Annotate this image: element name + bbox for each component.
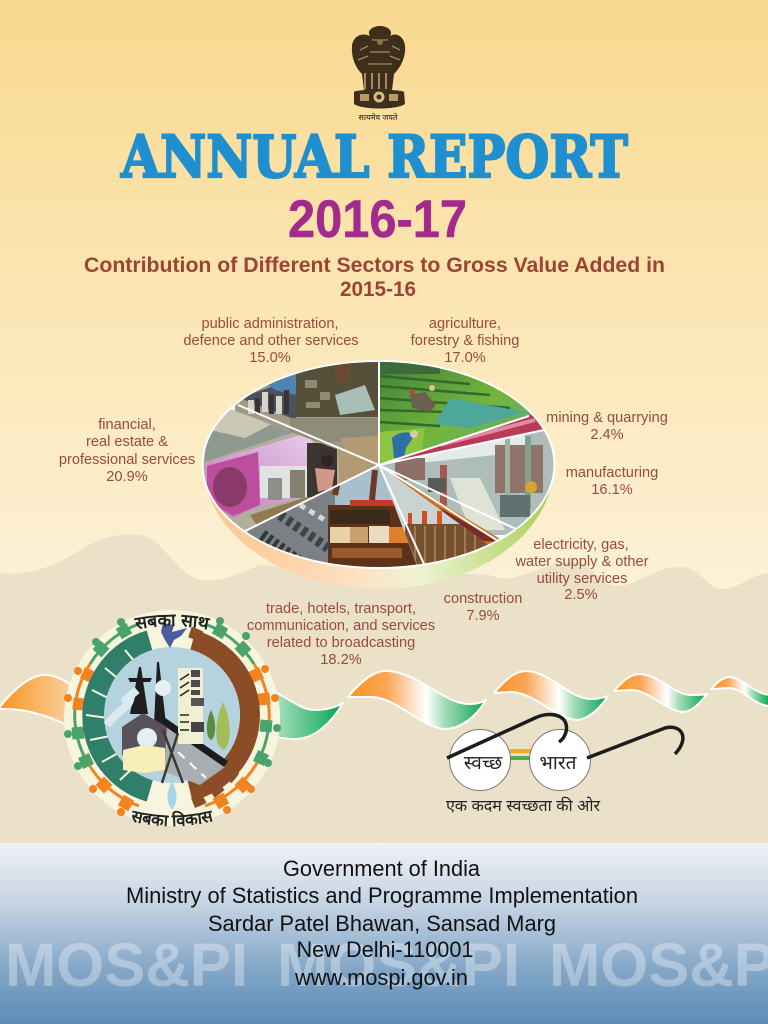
label: construction: 7.9%: [466, 608, 500, 624]
watermark: MOS&PI: [5, 931, 248, 999]
pie chart: [195, 355, 560, 589]
footer address: Sardar Patel Bhawan, Sansad Marg: [208, 911, 556, 936]
label: mining: mining & quarrying: [546, 410, 668, 426]
logo: towers: [128, 662, 171, 724]
title: ANNUAL REPORT: [120, 123, 628, 191]
logo: india map: [161, 623, 187, 648]
slice: construction: [382, 468, 488, 564]
label: public administration: 15.0%: [249, 350, 291, 366]
label: trade: communication, and services: [247, 618, 435, 634]
year: 2016-17: [288, 190, 467, 249]
logo: arrow sweep: [107, 690, 137, 725]
label: agriculture: forestry & fishing: [411, 333, 519, 349]
logo: wheat wreath: [86, 642, 150, 790]
logo: sabka saath sabka vikas: [64, 610, 281, 826]
label: trade: related to broadcasting: [267, 635, 415, 651]
slice: manufacturing: [382, 431, 554, 535]
swachh word: स्वच्छ: [464, 753, 503, 774]
logo: water drop: [167, 780, 177, 810]
label: public administration: [183, 316, 359, 366]
chart heading: Contribution of Different Sectors to Gross Value Added in: [84, 253, 665, 277]
footer address: New Delhi-110001: [296, 937, 474, 962]
slice: electricity: [390, 473, 500, 545]
label: public administration: defence and other services: [183, 333, 359, 349]
logo: central disc: [104, 647, 240, 783]
label: agriculture: 17.0%: [444, 350, 486, 366]
label: agriculture: agriculture,: [429, 316, 501, 332]
label: trade: [247, 601, 435, 668]
slice: mining: [398, 414, 543, 460]
label: financial: 20.9%: [106, 469, 148, 485]
logo: tools: [162, 730, 183, 783]
slice dividers: [238, 360, 544, 564]
label: mining: [546, 410, 668, 443]
label: electricity: [514, 537, 649, 603]
logo: trees: [207, 702, 230, 750]
chart heading: [84, 253, 665, 301]
slice: agriculture: [380, 362, 532, 464]
logo: house and book: [122, 713, 167, 773]
logo: road and rail: [160, 720, 226, 785]
label: agriculture: [411, 316, 519, 366]
swachh bharat glasses logo: [446, 714, 683, 815]
label: financial: real estate &: [86, 434, 168, 450]
logo: building: [178, 668, 204, 744]
label: trade: trade, hotels, transport,: [266, 601, 416, 617]
label: manufacturing: [566, 465, 658, 498]
pie rim: [203, 465, 554, 589]
slice: public administration: [235, 360, 380, 470]
label: trade: 18.2%: [320, 652, 362, 668]
watermark: MOS&PI: [277, 931, 520, 999]
emblem motto: सत्यमेव जयते: [359, 112, 398, 122]
label: electricity: electricity, gas,: [533, 537, 629, 553]
footer address: [126, 856, 638, 990]
tricolour ribbon: [0, 671, 768, 739]
label: public administration: public administration,: [201, 316, 339, 332]
footer address: Ministry of Statistics and Programme Implementation: [126, 883, 638, 908]
label: manufacturing: manufacturing: [566, 465, 658, 481]
label: construction: construction: [444, 591, 522, 607]
chart heading: 2015-16: [340, 277, 416, 301]
label: electricity: 2.5%: [564, 587, 598, 603]
watermark: [5, 931, 768, 999]
logo: hindi text top: सबका साथ: [134, 614, 210, 630]
tan hills: [0, 534, 768, 845]
label: financial: professional services: [59, 452, 195, 468]
label: financial: financial,: [98, 417, 156, 433]
label: construction: [444, 591, 522, 624]
logo: coloured ring of people: [75, 624, 269, 806]
national emblem: [352, 26, 405, 122]
logo: hindi text bottom: सबका विकास: [132, 810, 212, 826]
bharat word: भारत: [540, 753, 578, 774]
label: manufacturing: 16.1%: [591, 482, 633, 498]
slice: trade: [246, 466, 416, 567]
label: electricity: utility services: [537, 571, 627, 587]
label: mining: 2.4%: [590, 427, 624, 443]
footer address: Government of India: [283, 856, 480, 881]
label: financial: [59, 417, 195, 485]
slice: financial: [204, 409, 377, 532]
logo: gear: [190, 632, 251, 804]
slogan: एक कदम स्वच्छता की ओर: [446, 796, 601, 815]
footer band: [0, 843, 768, 1024]
footer address: www.mospi.gov.in: [294, 965, 468, 990]
label: electricity: water supply & other: [514, 554, 649, 570]
